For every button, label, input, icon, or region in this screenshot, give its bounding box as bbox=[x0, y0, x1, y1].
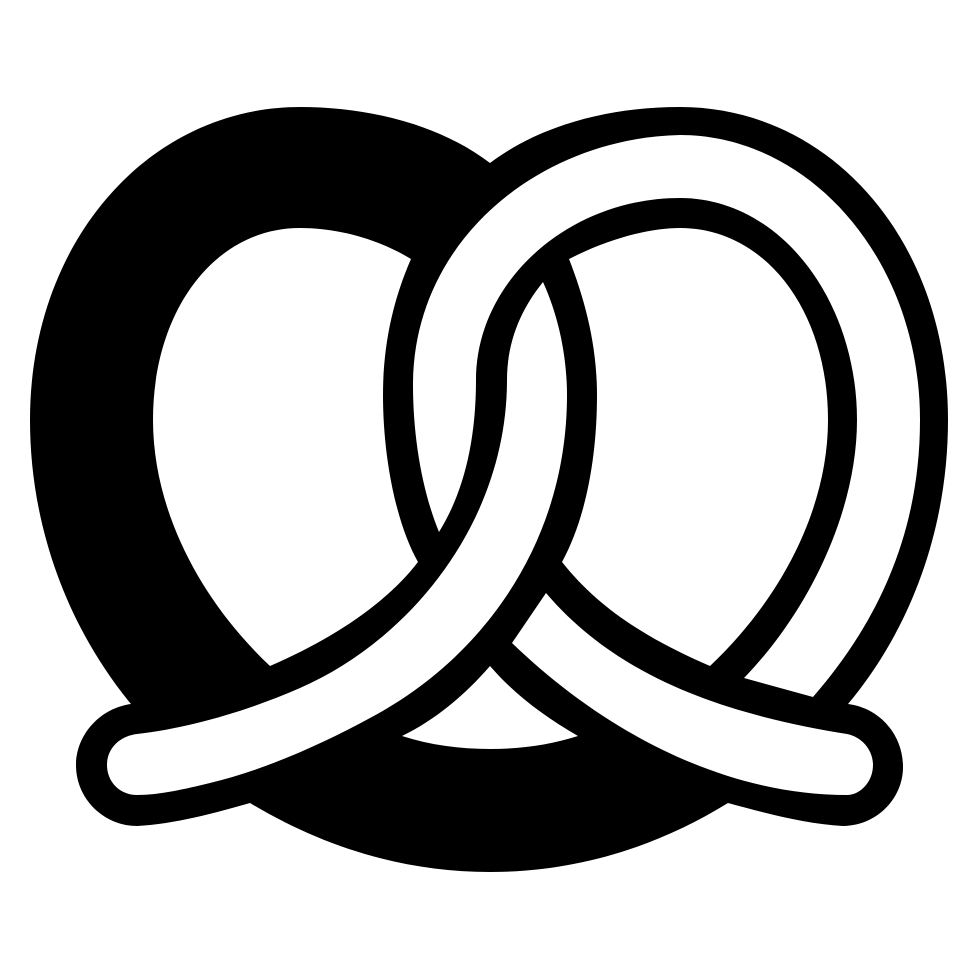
pretzel black silhouette bbox=[30, 107, 948, 872]
white band: right strand with end cap bbox=[512, 593, 873, 795]
bottom hole bbox=[402, 666, 578, 749]
left hole bbox=[153, 228, 418, 666]
right hole bbox=[562, 228, 828, 666]
white band: left strand with end cap bbox=[107, 282, 567, 795]
white band: top right strand bbox=[413, 135, 920, 697]
